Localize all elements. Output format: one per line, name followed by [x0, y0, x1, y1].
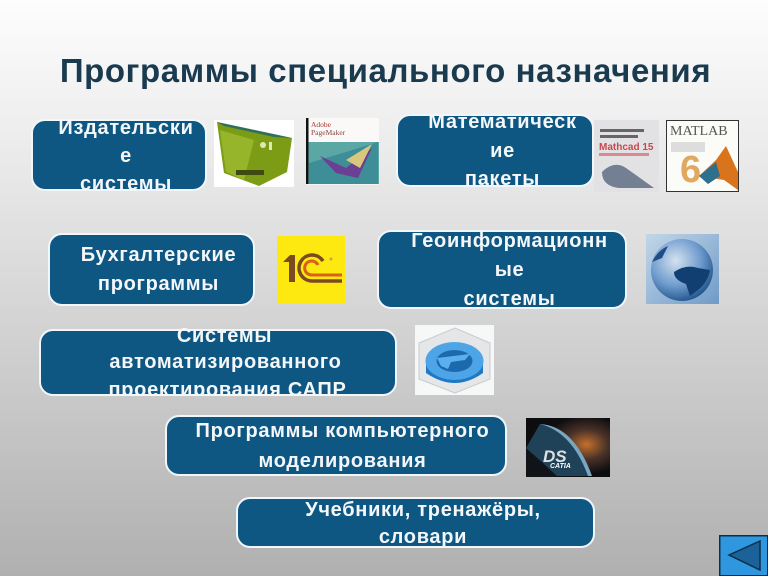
- icon: Mathcad book: [594, 120, 659, 188]
- panel: accounting programs: программы: [98, 272, 219, 294]
- panel: textbooks, trainers, dictionaries: [236, 497, 595, 548]
- panel: computer modeling programs: моделирования: [258, 450, 427, 472]
- icon: Adobe PageMaker box: Adobe: [311, 120, 332, 129]
- icon: MATLAB box: 6: [680, 149, 701, 191]
- title: Программы специального назначения: [60, 52, 711, 89]
- panel: publishing systems: Издательски: [58, 116, 194, 138]
- icon: Adobe PageMaker box: [306, 118, 379, 185]
- panel: CAD systems: Системы: [177, 324, 272, 346]
- icon: CATIA logo: CATIA: [550, 463, 571, 470]
- icon: CATIA logo: DS: [543, 447, 567, 466]
- panel: GIS: системы: [464, 288, 555, 310]
- icon: CAD logo: [415, 325, 494, 395]
- panel: computer modeling programs: [165, 415, 507, 476]
- panel: textbooks, trainers, dictionaries: Учебники, тренажёры,: [305, 499, 541, 521]
- panel: CAD systems: [39, 329, 397, 396]
- panel: publishing systems: системы: [80, 172, 172, 194]
- panel: textbooks, trainers, dictionaries: словари: [379, 526, 467, 548]
- panel: CAD systems: проектирования САПР: [108, 378, 347, 400]
- icon: back navigation button: [719, 535, 768, 576]
- icon: 1C logo: [277, 236, 345, 303]
- panel: GIS: ые: [495, 258, 524, 280]
- icon: Mathcad book: Mathcad 15: [599, 142, 654, 153]
- icon: Adobe PageMaker box: PageMaker: [311, 128, 346, 137]
- panel: computer modeling programs: Программы компьютерного: [196, 420, 489, 442]
- panel: GIS: Геоинформационн: [411, 230, 608, 252]
- icon: MATLAB box: MATLAB: [670, 124, 728, 139]
- icon: globe: [646, 234, 719, 304]
- panel: accounting programs: [48, 233, 255, 306]
- panel: math packages: Математическ: [428, 110, 577, 132]
- panel: math packages: ие: [490, 140, 515, 162]
- panel: publishing systems: [31, 119, 207, 191]
- icon: QuarkXPress box: [214, 120, 294, 187]
- icon: MATLAB box: [666, 120, 739, 192]
- icon: CATIA logo: [526, 418, 610, 477]
- panel: accounting programs: Бухгалтерские: [81, 244, 236, 266]
- panel: math packages: [396, 114, 594, 187]
- panel: GIS: [377, 230, 627, 309]
- panel: CAD systems: автоматизированного: [109, 350, 342, 372]
- panel: publishing systems: е: [120, 144, 132, 166]
- panel: math packages: пакеты: [465, 168, 540, 190]
